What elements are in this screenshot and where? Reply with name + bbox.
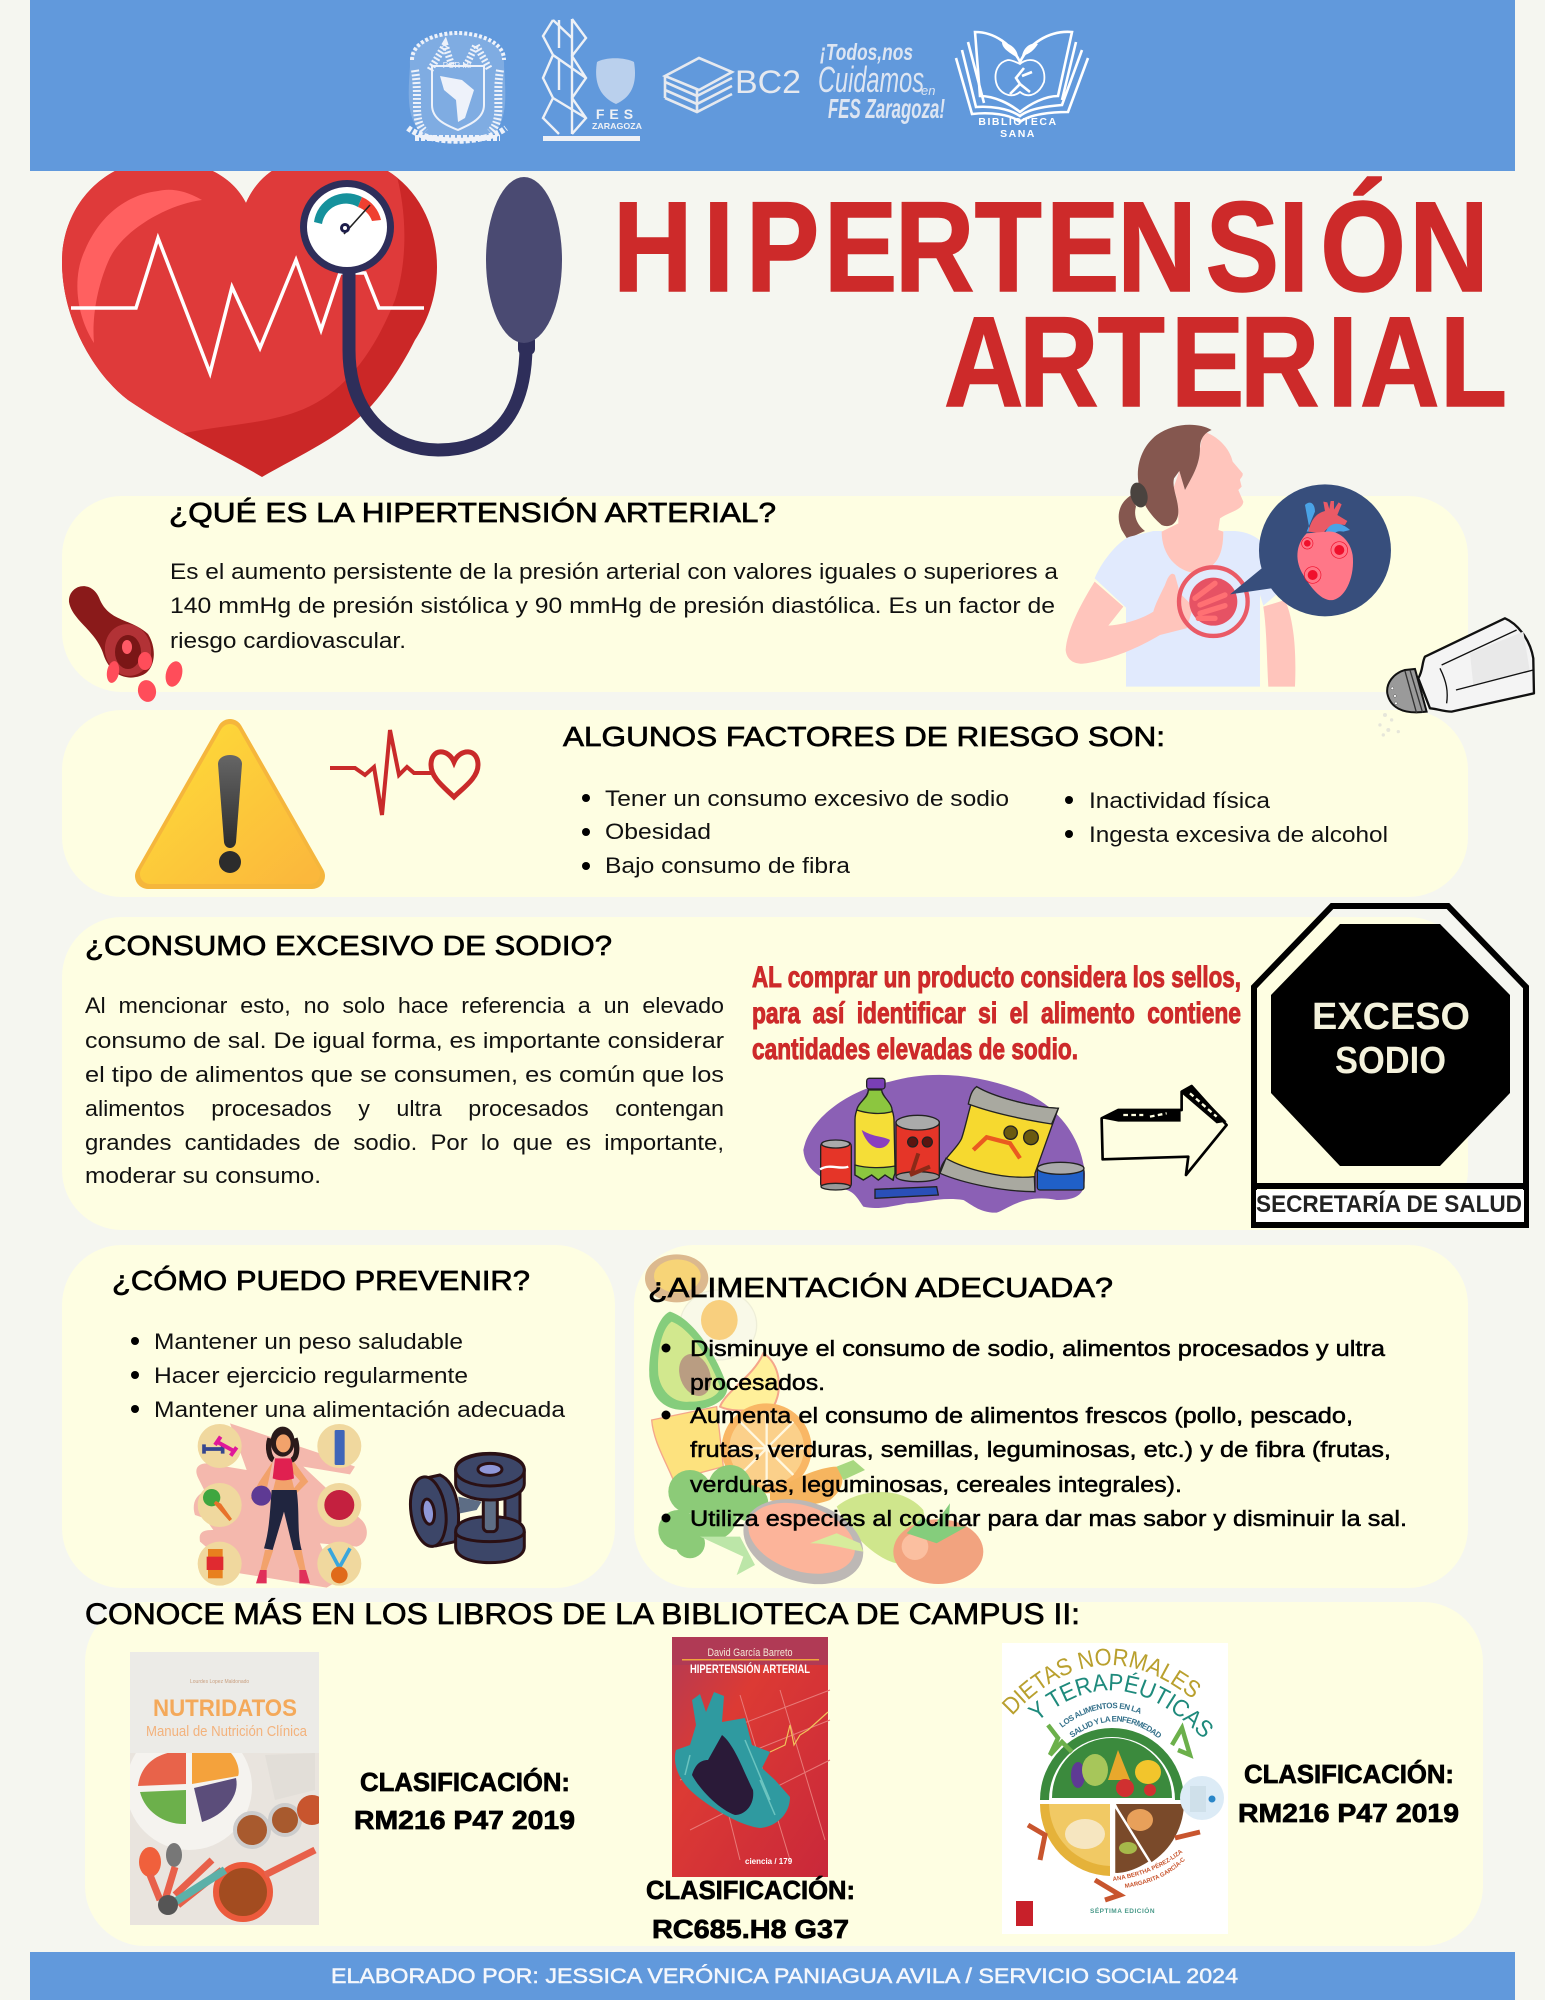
label: clasificación libro 1: CLASIFICACIÓN:	[360, 1767, 570, 1797]
heading: libros: CONOCE MÁS EN LOS LIBROS DE LA BIBLIOTECA DE CAMPUS II:	[85, 1598, 1080, 1631]
book cover: Hipertensión arterial	[672, 1637, 830, 1877]
label: clasificación libro 2: CLASIFICACIÓN:	[646, 1875, 855, 1905]
text block: definición: Es el aumento persistente de la presión arterial con valores iguales o superiores a	[170, 559, 1059, 584]
illustration: processed foods	[803, 1075, 1085, 1213]
text block: explicación sodio: grandes cantidades de sodio. Por lo que es importante,	[85, 1130, 724, 1155]
list: factores, columna 1: Bajo consumo de fibra	[605, 853, 851, 878]
logo: Biblioteca Sana	[956, 32, 1088, 140]
icon: dumbbell	[406, 1453, 524, 1563]
logo: FES Zaragoza: ZARAGOZA	[592, 121, 642, 131]
book cover: Dietas normales y terapéuticas: LOS ALIMENTOS EN LA	[1059, 1702, 1140, 1728]
book cover: Dietas normales y terapéuticas: SALUD Y LA ENFERMEDAD	[1070, 1716, 1161, 1738]
heading: factores de riesgo: ALGUNOS FACTORES DE RIESGO SON:	[563, 721, 1165, 752]
label: clasificación libro 2: RC685.H8 G37	[652, 1914, 849, 1944]
callout: sellos: cantidades elevadas de sodio.	[752, 1033, 1078, 1066]
label: clasificación libro 3: RM216 P47 2019	[1238, 1798, 1459, 1828]
list: factores, columna 2: Ingesta excesiva de alcohol	[1089, 822, 1388, 847]
panel: libros de la biblioteca	[85, 1598, 1483, 1946]
logo: Todos nos Cuidamos en FES Zaragoza: Cuidamos	[818, 59, 924, 100]
label: clasificación libro 3	[1238, 1759, 1459, 1828]
icon: heartbeat with heart	[330, 730, 478, 815]
illustration: healthy food collage	[645, 1254, 983, 1599]
text block: explicación sodio: alimentos procesados y ultra procesados contengan	[85, 1096, 724, 1121]
list: factores, columna 1	[582, 786, 1009, 878]
callout: sellos	[752, 961, 1241, 1066]
text block: definición: 140 mmHg de presión sistólica y 90 mmHg de presión diastólica. Es un factor de	[170, 593, 1055, 618]
label: clasificación libro 2	[646, 1875, 855, 1944]
list: factores, columna 2: Inactividad física	[1089, 788, 1271, 813]
book cover: Dietas normales y terapéuticas: Y TERAPÉUTICAS	[1027, 1672, 1212, 1737]
icon: exceso sodio seal	[1254, 906, 1526, 1225]
logo: UNAM crest	[408, 33, 506, 143]
book cover: Dietas normales y terapéuticas	[1002, 1643, 1228, 1934]
heading: qué es: ¿QUÉ ES LA HIPERTENSIÓN ARTERIAL?	[169, 497, 776, 528]
icon: exceso sodio seal: EXCESO	[1312, 996, 1470, 1038]
book cover: Hipertensión arterial: ciencia / 179	[745, 1857, 793, 1866]
footer band: ELABORADO POR: JESSICA VERÓNICA PANIAGUA AVILA / SERVICIO SOCIAL 2024	[331, 1965, 1238, 1988]
book cover: Dietas normales y terapéuticas: ANA BERTHA PÉREZ-LIZAUR	[1113, 1850, 1183, 1881]
list: prevención: Mantener una alimentación adecuada	[154, 1397, 566, 1422]
label: clasificación libro 1: RM216 P47 2019	[354, 1805, 575, 1835]
book cover: Nutridatos: Lourdes Lopez Maldonado	[190, 1679, 249, 1685]
logo: Todos nos Cuidamos en FES Zaragoza: en	[921, 83, 935, 98]
list: factores, columna 1: Tener un consumo excesivo de sodio	[605, 786, 1009, 811]
header band with logos	[30, 0, 1515, 171]
illustration: fitness woman with icons	[194, 1423, 367, 1588]
book cover: Nutridatos: Manual de Nutrición Clínica	[146, 1723, 308, 1740]
text block: explicación sodio: moderar su consumo.	[85, 1163, 321, 1188]
book cover: Dietas normales y terapéuticas: MARGARITA GARCÍA-CAMPOS	[1124, 1858, 1185, 1888]
text block: explicación sodio: consumo de sal. De igual forma, es importante considerar	[85, 1028, 724, 1053]
icon: warning triangle	[148, 732, 312, 876]
list: prevención	[131, 1329, 566, 1422]
logo: FES Zaragoza	[543, 19, 642, 141]
heading: alimentación: ¿ALIMENTACIÓN ADECUADA?	[648, 1272, 1113, 1303]
book cover: Hipertensión arterial: HIPERTENSIÓN ARTERIAL	[690, 1663, 810, 1676]
icon: salt shaker	[1378, 618, 1534, 737]
text block: definición	[170, 559, 1059, 653]
book cover: Dietas normales y terapéuticas: SÉPTIMA EDICIÓN	[1090, 1906, 1155, 1915]
heading: consumo excesivo: ¿CONSUMO EXCESIVO DE SODIO?	[85, 930, 612, 961]
panel: factores de riesgo	[62, 710, 1468, 897]
text block: explicación sodio: Al mencionar esto, no solo hace referencia a un elevado	[85, 993, 724, 1018]
label: clasificación libro 3: CLASIFICACIÓN:	[1244, 1759, 1454, 1789]
list: recomendaciones: Aumenta el consumo de alimentos frescos (pollo, pescado,	[690, 1403, 1353, 1428]
logo: Biblioteca Sana: SANA	[1000, 128, 1036, 140]
title: ARTERIAL	[944, 291, 1507, 434]
logo: Todos nos Cuidamos en FES Zaragoza	[818, 39, 945, 124]
text block: explicación sodio	[85, 993, 724, 1188]
list: recomendaciones: frutas, verduras, semillas, leguminosas, etc.) y de fibra (frutas,	[690, 1437, 1391, 1462]
list: prevención: Hacer ejercicio regularmente	[154, 1363, 468, 1388]
illustration: heart with blood pressure gauge	[62, 171, 562, 477]
logo: Todos nos Cuidamos en FES Zaragoza: ¡Todos,nos	[820, 39, 913, 65]
list: recomendaciones: procesados.	[690, 1370, 825, 1395]
heading: prevenir: ¿CÓMO PUEDO PREVENIR?	[112, 1265, 530, 1296]
logo: UNAM crest: POR MI	[443, 61, 471, 70]
list: recomendaciones	[662, 1336, 1407, 1531]
text block: explicación sodio: el tipo de alimentos que se consumen, es común que los	[85, 1062, 724, 1087]
callout: sellos: para así identificar si el alimento contiene	[752, 997, 1241, 1030]
list: factores, columna 1: Obesidad	[605, 819, 711, 844]
footer band	[30, 1952, 1515, 2000]
list: recomendaciones: verduras, leguminosas, cereales integrales).	[690, 1472, 1182, 1497]
logo: BC2: BC2	[735, 64, 801, 100]
panel: qué es la hipertensión arterial	[62, 425, 1468, 704]
text block: definición: riesgo cardiovascular.	[170, 628, 406, 653]
logo: Todos nos Cuidamos en FES Zaragoza: FES Zaragoza!	[828, 93, 945, 124]
list: recomendaciones: Disminuye el consumo de sodio, alimentos procesados y ultra	[690, 1336, 1386, 1361]
icon: blood vessel with red cells	[69, 586, 185, 704]
book cover: Nutridatos: NUTRIDATOS	[153, 1695, 297, 1722]
callout: sellos: AL comprar un producto considera los sellos,	[752, 961, 1241, 994]
logo: Biblioteca Sana: BIBLIOTECA	[978, 116, 1058, 128]
book cover: Dietas normales y terapéuticas: DIETAS NORMALES	[1002, 1648, 1200, 1715]
book cover: Hipertensión arterial: David García Barreto	[708, 1647, 792, 1659]
icon: exceso sodio seal: SECRETARÍA DE SALUD	[1256, 1190, 1522, 1218]
panel: alimentación adecuada	[634, 1245, 1468, 1599]
illustration: woman with chest pain and heart bubble	[1066, 425, 1391, 687]
list: factores, columna 2	[1065, 788, 1388, 847]
panel: cómo puedo prevenir	[62, 1245, 615, 1588]
arrow	[1102, 1086, 1227, 1175]
list: recomendaciones: Utiliza especias al cocinar para dar mas sabor y disminuir la sal.	[690, 1506, 1407, 1531]
title	[613, 176, 1507, 434]
logo: FES Zaragoza: FES	[596, 106, 638, 122]
icon: exceso sodio seal: SODIO	[1335, 1040, 1446, 1082]
list: prevención: Mantener un peso saludable	[154, 1329, 463, 1354]
label: clasificación libro 1	[354, 1767, 575, 1835]
logo: BC2	[665, 58, 801, 112]
panel: consumo excesivo de sodio	[62, 906, 1526, 1230]
title: HIPERTENSIÓN	[613, 176, 1489, 319]
book cover: Nutridatos	[126, 1652, 327, 1925]
